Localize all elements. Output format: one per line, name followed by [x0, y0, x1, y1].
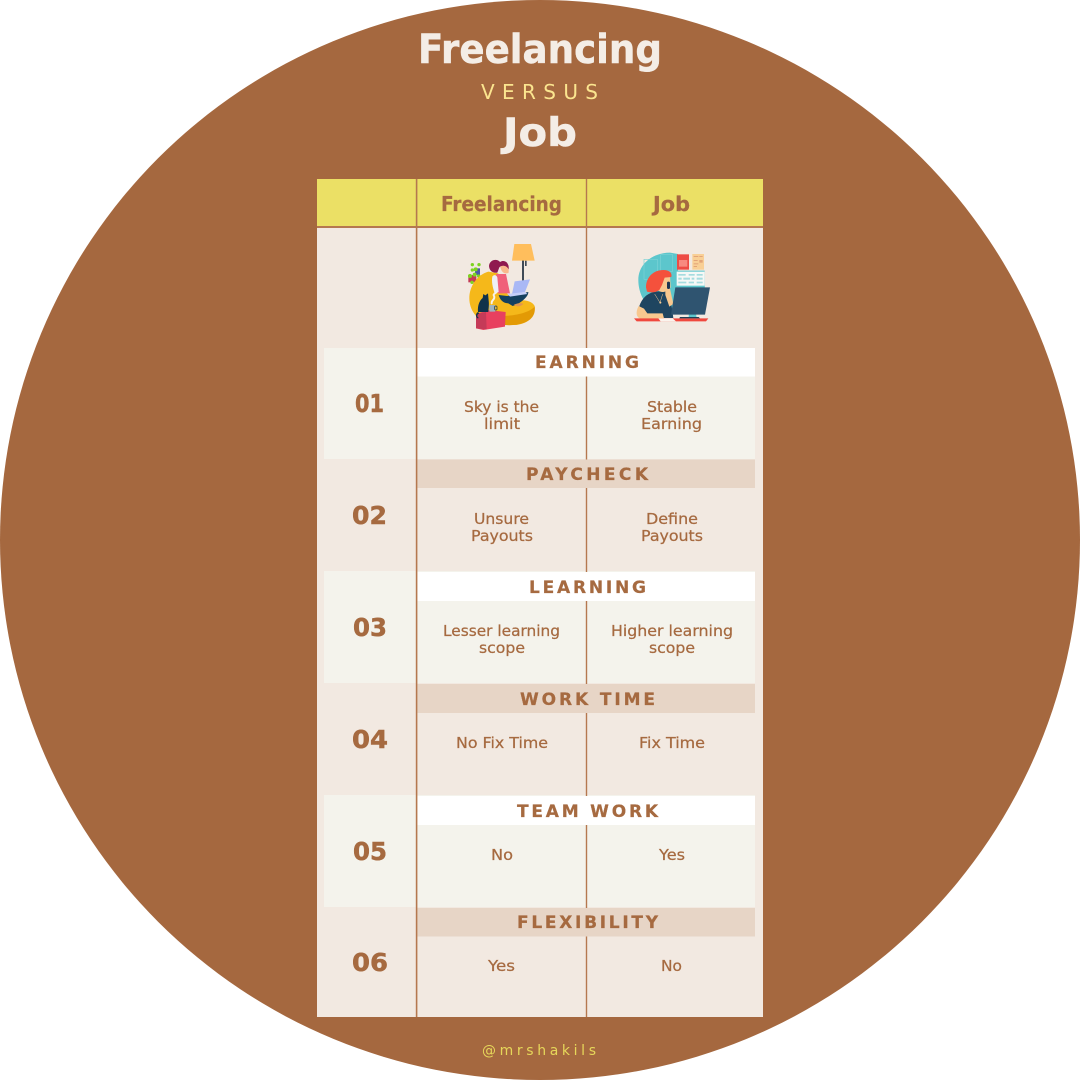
red box [476, 310, 506, 330]
row 06 content: No [661, 957, 682, 975]
monitor [671, 287, 710, 318]
row 03 content: 03 [353, 613, 387, 642]
band: learning: LEARNING [529, 578, 646, 598]
row 02 content [352, 501, 703, 545]
plant [468, 263, 481, 293]
laptop [507, 279, 530, 297]
comparison table [317, 179, 763, 1017]
tan note [692, 254, 704, 270]
icon: freelancer on beanbag [468, 244, 535, 330]
row 01 content: 01 [355, 389, 384, 418]
row 05 background [324, 795, 755, 907]
band: team work: TEAM WORK [517, 802, 659, 822]
icon: office worker at desk [634, 253, 710, 321]
red poster [677, 254, 689, 270]
row 04 content [352, 725, 705, 754]
row 02 content: 02 [352, 501, 387, 530]
row 05 content: Yes [658, 846, 685, 864]
band: flexibility: FLEXIBILITY [517, 913, 659, 933]
row 05 content [353, 837, 685, 866]
row 02 content: Payouts [471, 527, 533, 545]
row 01 content [355, 389, 702, 433]
calendar card [677, 272, 705, 286]
band: paycheck: PAYCHECK [526, 465, 649, 485]
title block [418, 27, 662, 156]
row 04 content: Fix Time [639, 734, 705, 752]
faint wall frames [644, 255, 673, 279]
row 03 content: Higher learning [611, 622, 733, 640]
row 03 background [324, 571, 755, 683]
row 06 content [352, 948, 682, 977]
band: team work [418, 796, 755, 825]
band: work time [418, 684, 755, 713]
band: learning [418, 572, 755, 601]
header divider [317, 226, 763, 228]
row 02 content: Define [646, 510, 698, 528]
title: Freelancing: Freelancing [418, 27, 662, 73]
header band [317, 179, 763, 226]
row 03 content: scope [479, 639, 525, 657]
title: Job: Job [500, 111, 577, 156]
row 05 content: No [491, 846, 513, 864]
row 04 content: No Fix Time [456, 734, 548, 752]
row 01 content: limit [484, 415, 520, 433]
column lines [416, 179, 587, 1017]
row 03 content: scope [649, 639, 695, 657]
cat [476, 293, 489, 319]
beanbag [469, 272, 535, 325]
band: earning: EARNING [535, 353, 639, 373]
header: Freelancing: Freelancing [441, 192, 562, 216]
mug with steam [489, 292, 497, 312]
lamp [512, 244, 535, 281]
row 01 content: Sky is the [464, 398, 539, 416]
row 05 content: 05 [353, 837, 387, 866]
band: flexibility [418, 908, 755, 936]
row 03 content: Lesser learning [443, 622, 560, 640]
row 03 content [353, 613, 733, 657]
footer handle: @mrshakils [482, 1043, 596, 1059]
row 06 content: Yes [487, 957, 515, 975]
row 01 background [324, 348, 755, 459]
header: Job: Job [651, 192, 690, 216]
row 01 content: Stable [647, 398, 697, 416]
row 04 content: 04 [352, 725, 388, 754]
table body background [317, 179, 763, 1017]
desk [634, 317, 708, 321]
teal circle backdrop [638, 253, 705, 310]
row 01 content: Earning [641, 415, 702, 433]
band: earning [418, 348, 755, 376]
row 02 content: Unsure [474, 510, 529, 528]
row 02 content: Payouts [641, 527, 703, 545]
band: work time: WORK TIME [520, 690, 655, 710]
person [489, 260, 528, 306]
worker [637, 270, 673, 319]
row 06 content: 06 [352, 948, 388, 977]
subtitle: versus: VERSUS [481, 80, 598, 104]
band: paycheck [418, 460, 755, 488]
